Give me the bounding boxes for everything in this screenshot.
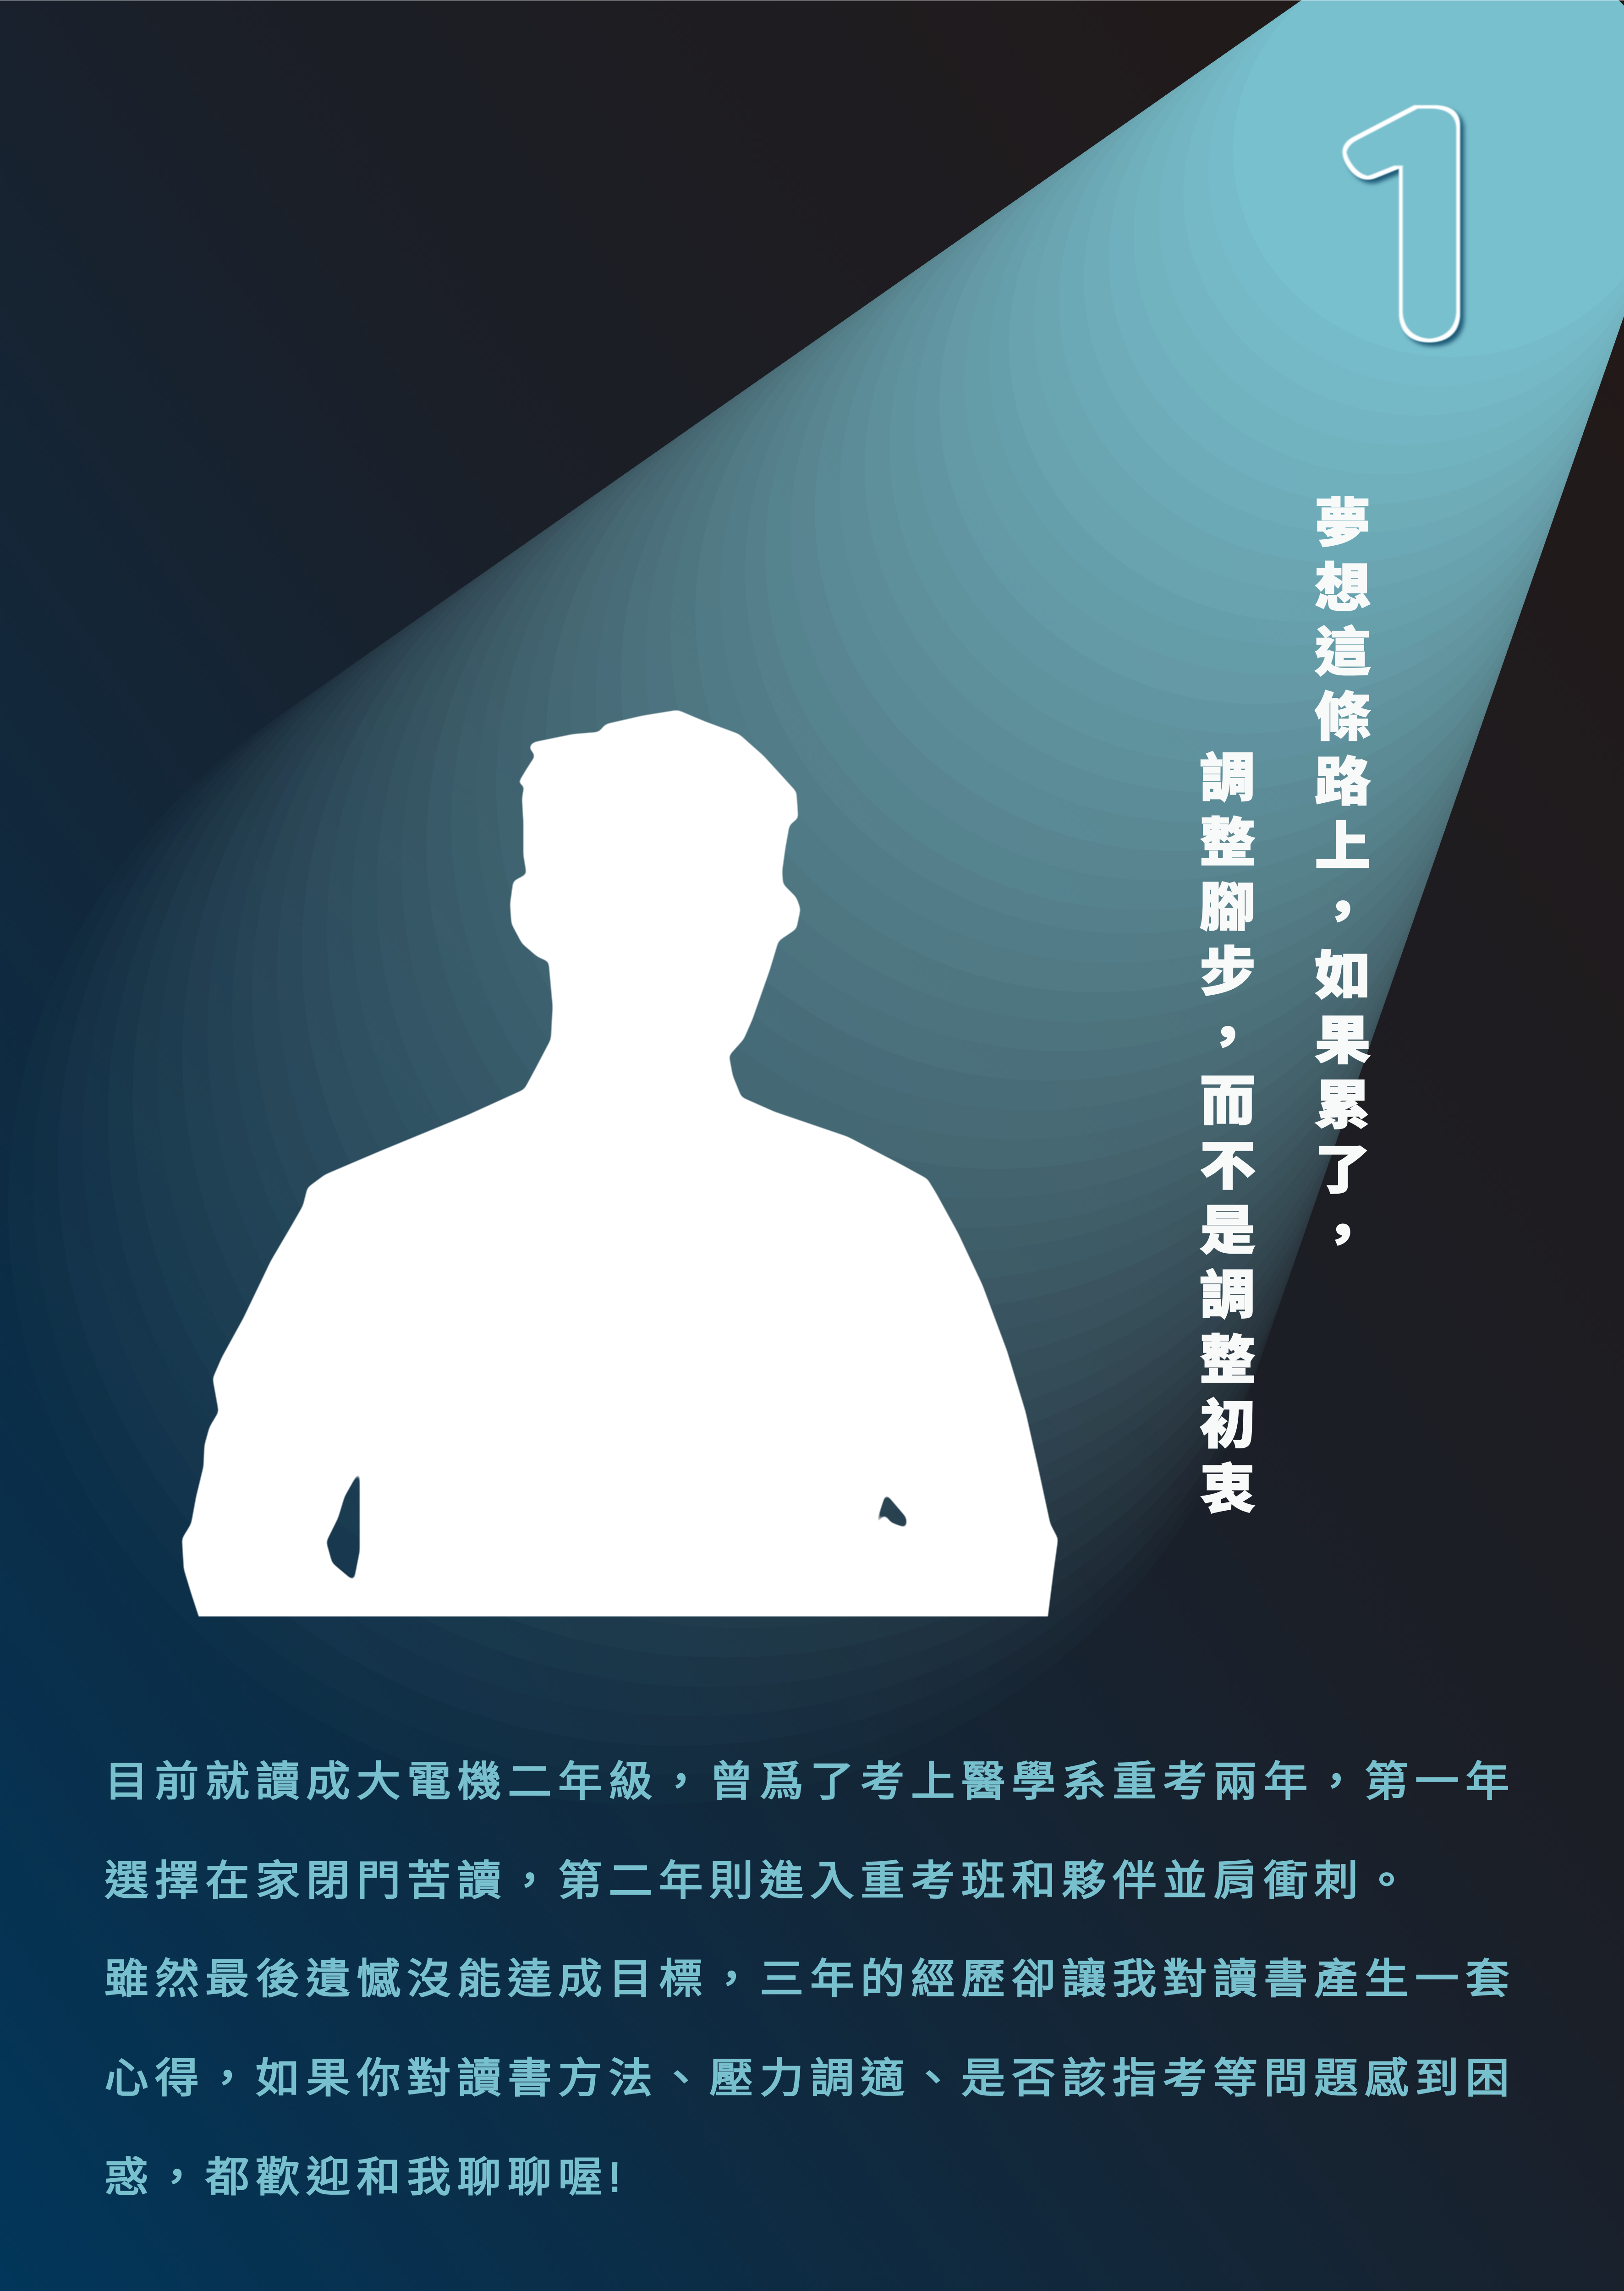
body line 5: 惑，都歡迎和我聊聊喔!: [104, 2154, 627, 2200]
body line 3: 雖然最後遺憾沒能達成目標，三年的經歷卻讓我對讀書產生一套: [104, 1956, 1516, 2002]
slogan: left vertical line: 調整腳步，而不是調整初衷: [1187, 750, 1268, 1526]
body line 2: 選擇在家閉門苦讀，第二年則進入重考班和夥伴並肩衝刺。: [104, 1858, 1415, 1904]
spotlight beam: [83, 0, 1624, 1716]
body line 4: 心得，如果你對讀書方法、壓力調適、是否該指考等問題感到困: [104, 2055, 1516, 2101]
numeral 1: 1: [1304, 36, 1534, 414]
silhouette of person: [182, 710, 1058, 1633]
body paragraph: [104, 1759, 1516, 2200]
slogan: right vertical line: 夢想這條路上，如果累了，: [1302, 495, 1383, 1271]
body line 1: 目前就讀成大電機二年級，曾爲了考上醫學系重考兩年，第一年: [104, 1759, 1516, 1804]
